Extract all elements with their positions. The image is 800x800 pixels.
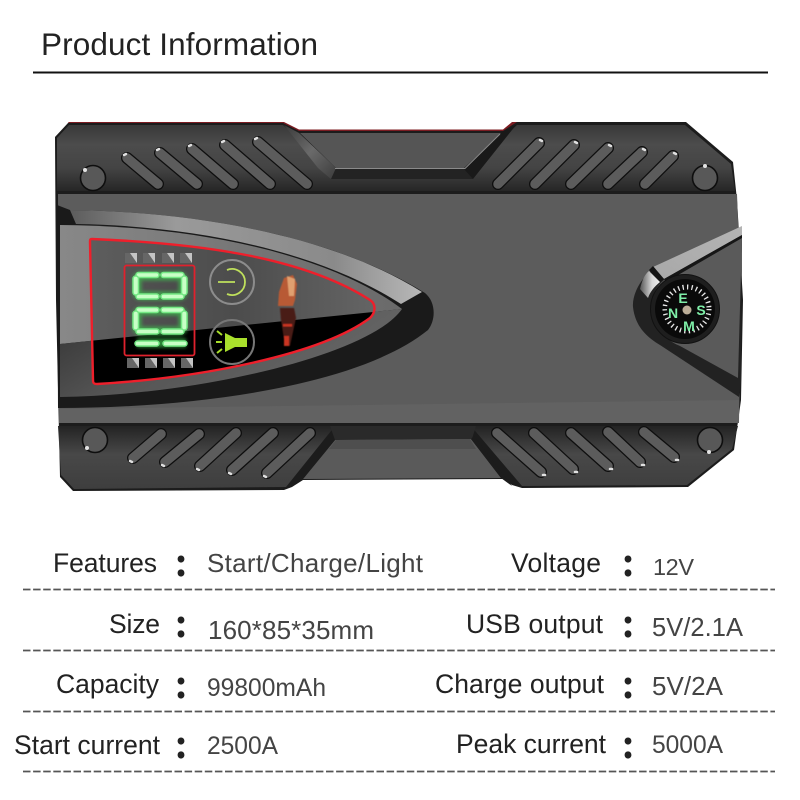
row: capacity and charge output: Capacity — [56, 669, 160, 699]
bottom band — [58, 426, 738, 489]
row: capacity and charge output — [56, 655, 724, 709]
row: features and voltage: Voltage — [511, 548, 601, 578]
title: Product Information — [41, 26, 318, 62]
bottom recess — [303, 439, 501, 479]
row: features and voltage: 12V — [653, 554, 694, 580]
glass lower — [60, 309, 402, 397]
middle panel — [58, 194, 741, 423]
row: capacity and charge output: : — [622, 655, 634, 709]
compass: E — [678, 290, 688, 306]
device body — [55, 122, 743, 491]
silver crescent — [70, 210, 422, 304]
row: capacity and charge output: Charge output — [435, 669, 605, 699]
lower highlight strip — [59, 400, 739, 423]
row: start current and peak current: 2500A — [207, 733, 279, 760]
row: size and usb output: 160*85*35mm — [208, 615, 374, 645]
display dome — [57, 205, 434, 408]
screw holes — [80, 164, 722, 454]
row: start current and peak current: Peak current — [456, 729, 607, 759]
silver strip — [653, 226, 742, 279]
compass: S — [696, 302, 706, 318]
dark bezel — [57, 205, 434, 408]
compass: N — [668, 305, 678, 321]
compass — [650, 274, 720, 344]
row: start current and peak current — [14, 715, 724, 769]
indicator tabs — [125, 253, 193, 368]
segment display — [124, 266, 194, 356]
row: capacity and charge output: 99800mAh — [207, 675, 326, 702]
compass: M — [683, 318, 695, 334]
row: capacity and charge output: : — [175, 655, 187, 709]
logo — [278, 275, 297, 346]
row: features and voltage: Start/Charge/Light — [207, 548, 424, 578]
row: size and usb output: 5V/2.1A — [652, 614, 743, 642]
glass upper — [60, 225, 402, 344]
row: features and voltage: Features — [53, 548, 157, 578]
row: size and usb output: Size — [109, 609, 160, 639]
vent grooves — [124, 138, 678, 477]
icon: flashlight button — [210, 320, 254, 364]
row: start current and peak current: : — [622, 715, 634, 769]
red panel interior — [91, 240, 373, 383]
compass assembly — [633, 226, 742, 397]
spec table — [14, 533, 775, 772]
row: size and usb output: : — [622, 594, 634, 648]
row: start current and peak current: : — [175, 715, 187, 769]
side wedge — [651, 236, 742, 378]
row: size and usb output: : — [175, 594, 187, 648]
dark compass bezel — [633, 232, 742, 397]
top band — [57, 125, 735, 191]
row: features and voltage: : — [175, 533, 187, 587]
red back edge — [68, 122, 522, 133]
red outline — [90, 239, 374, 384]
row: features and voltage — [53, 533, 694, 587]
row: capacity and charge output: 5V/2A — [652, 671, 724, 701]
icon: power button — [210, 260, 254, 304]
row: size and usb output — [109, 594, 743, 648]
row: size and usb output: USB output — [466, 609, 604, 639]
row: start current and peak current: 5000A — [652, 732, 724, 759]
top recess — [300, 133, 502, 168]
product image: jump starter — [55, 122, 743, 491]
row: start current and peak current: Start current — [14, 730, 161, 760]
row: features and voltage: : — [622, 533, 634, 587]
